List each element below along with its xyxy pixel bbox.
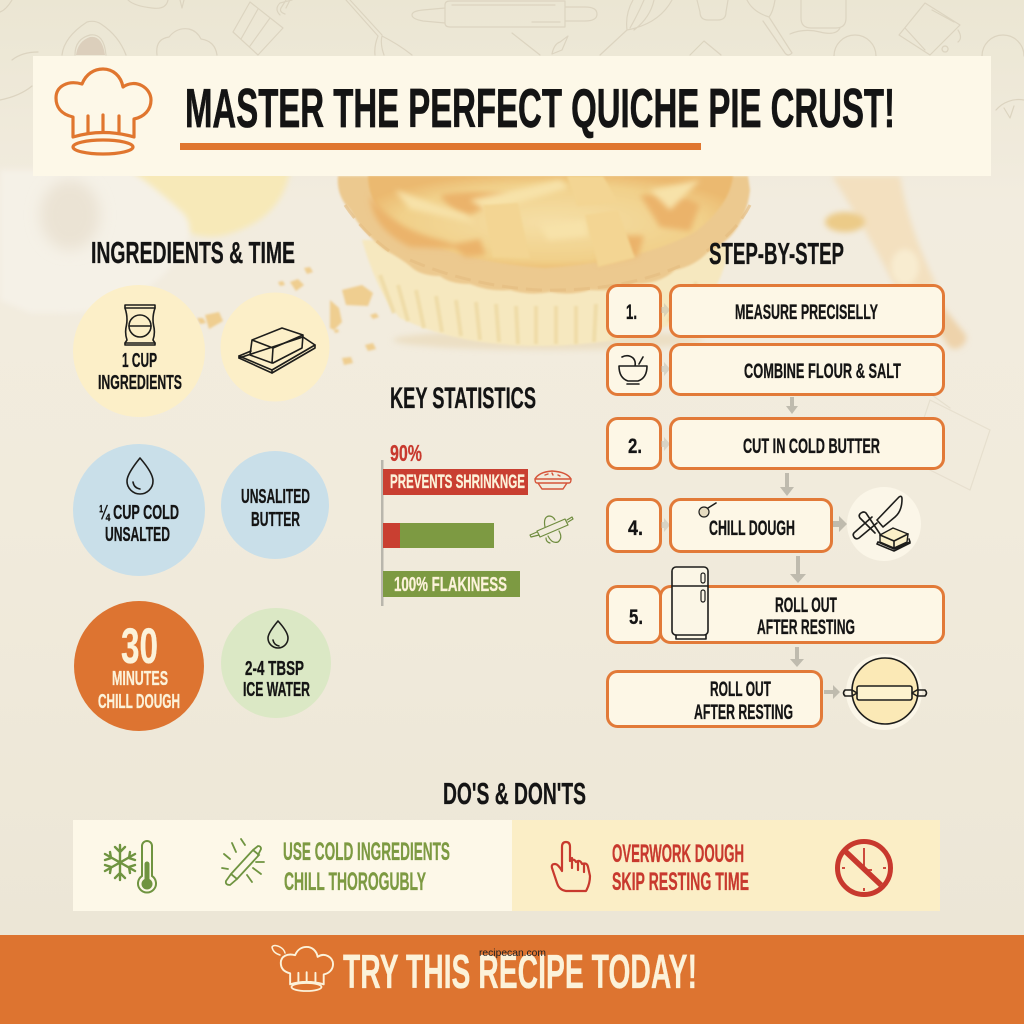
step 5: ROLL OUT [775,594,837,617]
circle: cold unsalted [73,444,205,576]
doodle fill: pan [76,37,105,55]
panel: don'ts: SKIP RESTING TIME [612,868,749,896]
circle: ice water: 2-4 TBSP [245,658,304,680]
step: combine [608,344,944,394]
stat: 90 percent [383,440,528,495]
arrow [790,647,804,667]
circle: flour [73,285,205,417]
background kitchen doodles [0,0,1024,118]
do text: USE COLD INGREDIENTS [283,838,450,866]
title underline [180,143,701,150]
stat: flakiness: 100% FLAKINESS [394,574,507,596]
step: combine: COMBINE FLOUR & SALT [744,360,901,383]
background photo: quiche [338,176,750,350]
footer banner [0,935,1024,1024]
step 5: AFTER RESTING [757,616,855,639]
circle: unsalted butter: BUTTER [251,509,300,531]
circle: butter icon [220,292,330,402]
circle: flour: 1 CUP [122,350,157,372]
circle: ice water [221,608,331,718]
circle: 30 minutes [74,601,204,731]
background photo: faint toast doodle [900,372,990,490]
circle: 30 minutes: 30 [121,618,158,674]
heading: ingredients: INGREDIENTS & TIME [91,235,295,270]
panel: do's: CHILL THOROGUBLY [284,868,426,896]
step 1: 1. [626,301,637,324]
icon: chef hat [56,69,151,154]
header panel [33,56,991,176]
background photo: rolling pin [825,176,966,349]
stat: 90 percent: PREVENTS SHRINKNGE [390,472,525,493]
step 6: ROLL OUT [710,678,771,701]
step 6: AFTER RESTING [694,701,793,724]
footer text: TRY THIS RECIPE TODAY! [343,946,697,999]
circle: 30 minutes: MINUTES [112,668,168,690]
step 4: 4. [628,517,643,540]
circle: cold unsalted: ¼ CUP COLD [99,502,179,524]
arrow [833,516,847,532]
step 1: MEASURE PRECISELLY [735,301,878,324]
icon: knife and butter [847,487,921,561]
circle: ice water: ICE WATER [243,679,310,701]
step 4 [608,500,832,552]
circle: unsalted butter: UNSALITED [241,486,310,508]
stat: 90 percent: 90% [390,440,422,466]
heading: do's and don'ts: DO'S & DON'TS [443,776,586,811]
step 2: CUT IN COLD BUTTER [743,435,880,458]
panel: don'ts [512,820,940,911]
icon: chef hat and whisk [272,946,333,991]
stat axis [381,460,384,606]
heading: key statistics: KEY STATISTICS [390,382,536,415]
circle: unsalted butter [221,451,329,559]
panel: do's and don'ts [73,776,940,911]
background photo: white bowl and yellow bowl [0,170,290,313]
arrow [824,685,840,699]
step 5 [608,567,944,642]
icon: rolling pin on dough [844,654,926,730]
icon: rolling pin [222,839,264,885]
arrow [790,556,806,583]
icon: pie [535,471,571,489]
step 2: 2. [628,435,642,458]
panel: do's [73,820,512,911]
step 5: 5. [629,606,643,629]
circle: cold unsalted: UNSALTED [105,524,170,546]
circle: flour: INGREDIENTS [98,372,182,394]
circle: 30 minutes: CHILL DOUGH [98,691,180,713]
stat: flakiness [383,571,520,597]
step 4: CHILL DOUGH [709,517,795,540]
panel: key statistics [381,382,573,606]
icon: pointing hand [552,842,590,891]
panel: step by step [608,236,944,730]
step 2 [608,418,944,468]
icon: fridge [672,567,708,639]
background photo: crumbs [197,267,379,365]
arrow [786,397,798,414]
watermark: recipecan.com [479,947,546,959]
arrow [780,473,794,496]
stat: mixed bar [383,523,494,548]
icon: no clock [838,842,890,894]
heading: step by step: STEP-BY-STEP [709,236,844,271]
icon: rolling pin [530,516,573,543]
step 1 [608,286,944,336]
don't text: OVERWORK DOUGH [612,840,744,868]
panel: ingredients and time [73,235,331,731]
icon: snowflake thermometer [105,841,156,892]
step 6 [608,672,822,726]
